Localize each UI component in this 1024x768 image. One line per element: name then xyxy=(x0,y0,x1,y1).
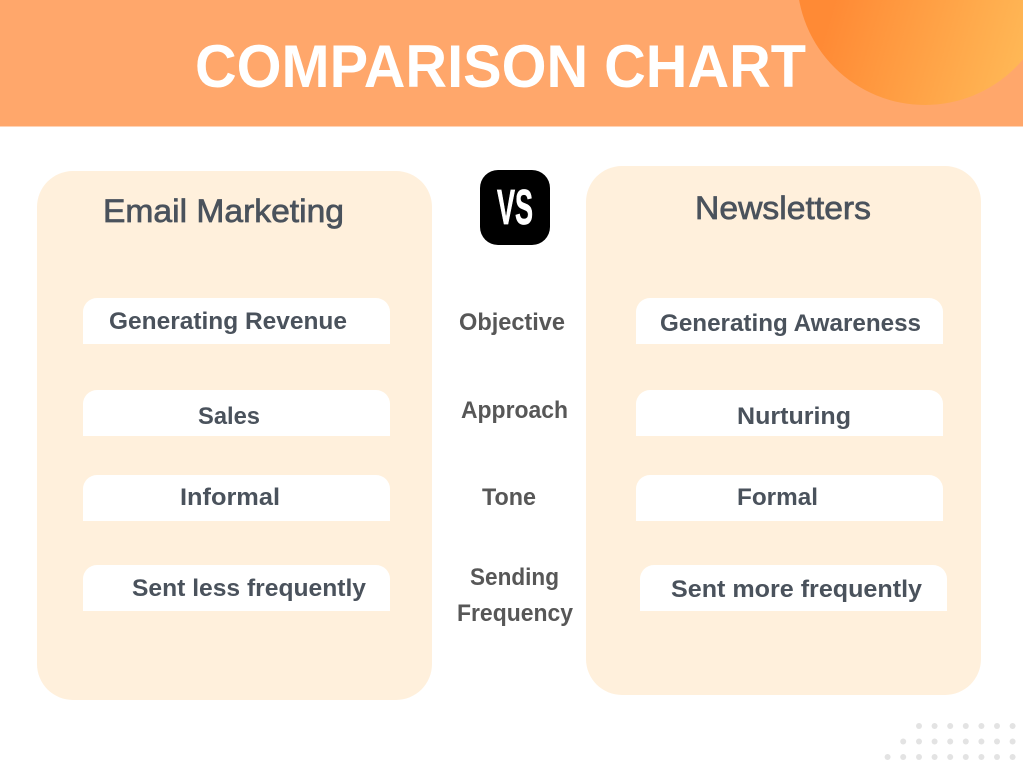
label: objective: Objective xyxy=(459,309,565,336)
label: approach: Approach xyxy=(461,397,568,424)
row: generating revenue: Generating Revenue xyxy=(109,308,347,335)
row: generating awareness xyxy=(636,298,943,344)
row: generating awareness: Generating Awareness xyxy=(660,310,921,337)
label: sending frequency: Sending xyxy=(470,564,559,591)
row: informal: Informal xyxy=(180,484,280,511)
row: sent more frequently xyxy=(640,565,947,611)
panel: newsletters xyxy=(586,166,981,695)
header banner xyxy=(0,0,1024,126)
row: nurturing xyxy=(636,390,943,436)
title: COMPARISON CHART xyxy=(195,33,806,100)
panel background xyxy=(37,171,432,700)
row: informal xyxy=(83,475,390,521)
banner background xyxy=(0,0,1023,126)
decorative gradient circle xyxy=(797,0,1024,105)
row: sent less frequently: Sent less frequently xyxy=(132,575,367,602)
row: formal: Formal xyxy=(737,484,818,511)
heading: newsletters: Newsletters xyxy=(695,190,871,226)
panel: email marketing xyxy=(37,171,432,700)
decorative dot grid xyxy=(885,723,1016,760)
label: sending frequency xyxy=(457,564,574,627)
icon: vs badge: VS xyxy=(497,181,533,235)
row: nurturing: Nurturing xyxy=(737,403,851,430)
panel background xyxy=(586,166,981,695)
row: sales: Sales xyxy=(198,403,260,430)
label: tone: Tone xyxy=(482,484,536,511)
row: generating revenue xyxy=(83,298,390,344)
criteria labels xyxy=(457,309,574,627)
row: sales xyxy=(83,390,390,436)
row: sent more frequently: Sent more frequently xyxy=(671,576,923,603)
label: sending frequency: Frequency xyxy=(457,600,574,627)
icon: vs badge xyxy=(480,170,550,245)
row: sent less frequently xyxy=(83,565,390,611)
heading: email marketing: Email Marketing xyxy=(103,193,344,229)
row: formal xyxy=(636,475,943,521)
